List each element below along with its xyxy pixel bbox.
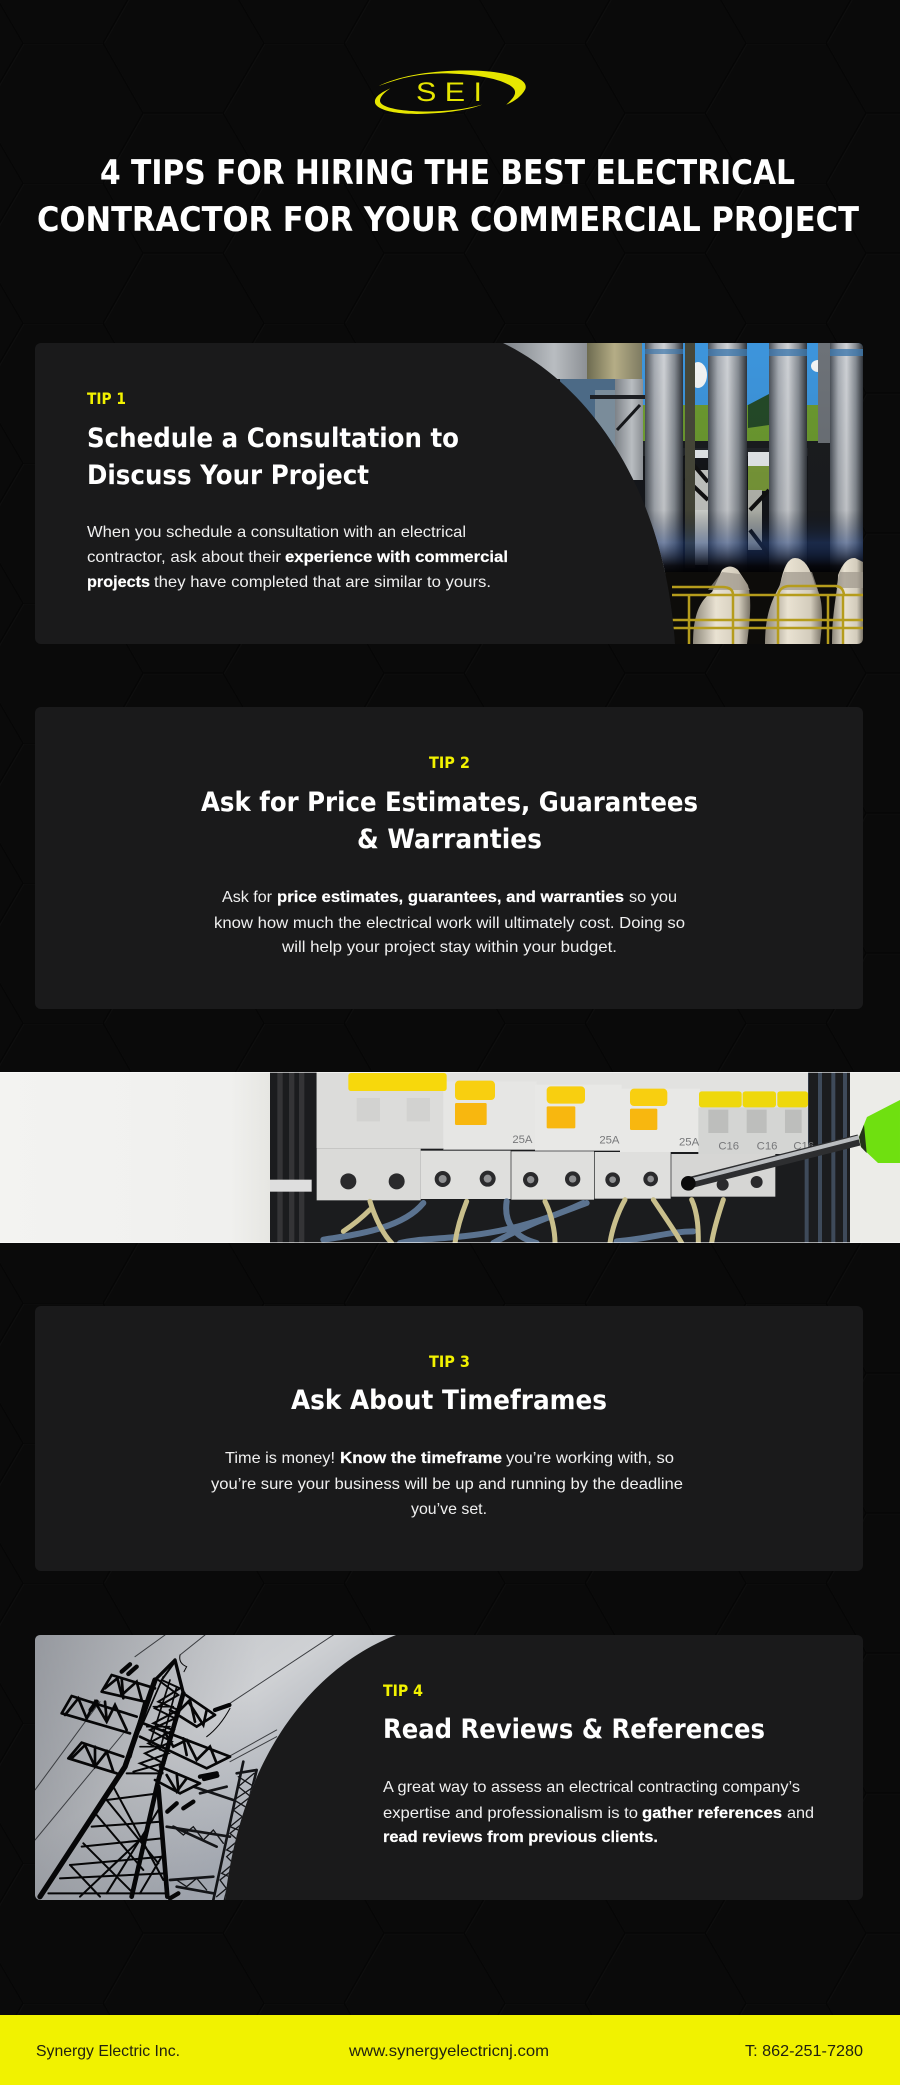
card background 2 xyxy=(35,707,863,1009)
card background 3 xyxy=(35,1306,863,1571)
logo: SEI: S E I xyxy=(416,77,482,107)
heading tip 2 xyxy=(201,787,698,855)
amperage labels: 25A xyxy=(512,1134,533,1146)
wires right xyxy=(807,1072,845,1243)
footer website: www.synergyelectricnj.com xyxy=(348,2043,549,2060)
body tip 3: Know the timeframe xyxy=(340,1450,502,1467)
logo: SEI xyxy=(375,70,526,114)
pipes xyxy=(645,343,683,575)
card background 1 xyxy=(35,343,863,644)
title xyxy=(37,153,860,240)
yellow railing xyxy=(672,586,863,644)
body tip 2: so you xyxy=(629,889,677,906)
tanks xyxy=(503,343,588,379)
far tower xyxy=(167,1762,257,1900)
heading tip 3: Ask About Timeframes xyxy=(291,1385,607,1416)
amperage labels: 25A xyxy=(679,1136,700,1148)
near tower legs xyxy=(40,1680,155,1897)
body tip 2: know how much the electrical work will ultimately cost. Doing so xyxy=(214,915,685,932)
body tip 1: they have completed that are similar to yours. xyxy=(154,574,491,591)
amperage labels: C16 xyxy=(718,1141,739,1153)
label tip 1: TIP 1 xyxy=(87,389,126,408)
label tip 3: TIP 3 xyxy=(429,1352,470,1371)
body tip 4 xyxy=(383,1779,814,1846)
heading tip 2: & Warranties xyxy=(357,824,542,855)
label tip 4: TIP 4 xyxy=(383,1681,423,1700)
title: 4 TIPS FOR HIRING THE BEST ELECTRICAL xyxy=(100,153,795,193)
body tip 4: expertise and professionalism is to xyxy=(383,1805,638,1822)
panel: tip 4 xyxy=(35,1635,863,1900)
heading tip 2: Ask for Price Estimates, Guarantees xyxy=(201,787,698,818)
breaker bodies xyxy=(317,1072,808,1148)
heading tip 1: Discuss Your Project xyxy=(87,460,369,491)
heading tip 1: Schedule a Consultation to xyxy=(87,423,459,454)
crossarms xyxy=(62,1675,230,1793)
screwdriver xyxy=(688,1140,859,1183)
body tip 1: projects xyxy=(87,574,150,591)
body tip 3: Time is money! xyxy=(225,1450,335,1467)
body tip 1: contractor, ask about their xyxy=(87,549,282,566)
heading tip 1 xyxy=(87,423,459,491)
terminal blocks xyxy=(317,1149,421,1200)
yellow toggles xyxy=(348,1073,447,1091)
body tip 3 xyxy=(211,1450,683,1518)
amperage labels: 25A xyxy=(599,1135,620,1147)
near tower lattice upper xyxy=(127,1662,180,1773)
photo: industrial pipes xyxy=(480,343,863,644)
footer phone: T: 862-251-7280 xyxy=(745,2043,863,2060)
heading tip 4: Read Reviews & References xyxy=(383,1714,765,1745)
wires below xyxy=(323,1200,723,1243)
footer bar xyxy=(0,2015,900,2085)
body tip 2: will help your project stay within your budget. xyxy=(281,939,617,956)
footer company: Synergy Electric Inc. xyxy=(36,2043,180,2060)
photo: transmission tower xyxy=(35,1635,405,1900)
card background 4 xyxy=(35,1635,863,1900)
body tip 2: Ask for xyxy=(222,889,273,906)
body tip 2 xyxy=(214,889,685,956)
panel: tip 2 xyxy=(35,707,863,1009)
label tip 2: TIP 2 xyxy=(429,753,470,772)
amperage labels: C16 xyxy=(793,1141,814,1153)
body tip 4: read reviews from previous clients. xyxy=(383,1829,658,1846)
body tip 2: price estimates, guarantees, and warranties xyxy=(277,889,624,906)
lower bracing xyxy=(48,1787,167,1897)
panel: tip 1 xyxy=(35,343,863,644)
body tip 1: When you schedule a consultation with an electrical xyxy=(87,524,466,541)
photo banner: circuit breakers xyxy=(0,1072,900,1243)
wires left xyxy=(280,1072,302,1243)
body tip 4: and xyxy=(787,1805,814,1822)
body tip 4: gather references xyxy=(642,1805,782,1822)
body tip 3: you’ve set. xyxy=(411,1501,487,1518)
body tip 3: you’re working with, so xyxy=(506,1450,674,1467)
amperage labels xyxy=(512,1136,814,1150)
body tip 1: experience with commercial xyxy=(285,549,508,566)
wires xyxy=(35,1635,333,1840)
body tip 1 xyxy=(87,524,508,591)
body tip 4: A great way to assess an electrical contracting company’s xyxy=(383,1779,800,1796)
body tip 3: you’re sure your business will be up and running by the deadline xyxy=(211,1476,683,1493)
amperage labels: C16 xyxy=(757,1141,777,1153)
panel: tip 3 xyxy=(35,1306,863,1571)
insulated pipes xyxy=(693,566,750,644)
insulators xyxy=(91,1664,229,1898)
